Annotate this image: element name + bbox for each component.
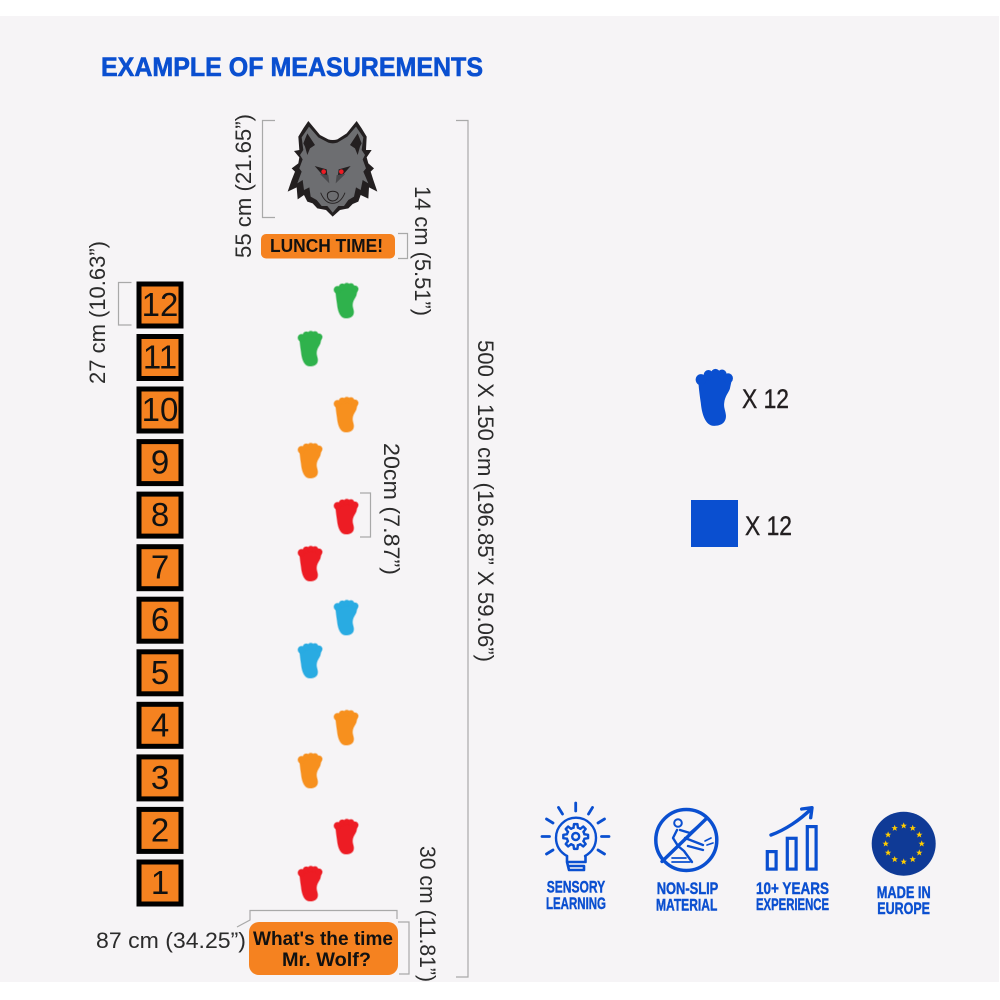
badge: made in europe <box>872 812 936 918</box>
badge: sensory learning <box>542 803 609 913</box>
icon: wolf head <box>288 121 377 217</box>
sign: lunch time: LUNCH TIME! <box>270 236 383 256</box>
square 8: 8 <box>151 496 169 533</box>
sign: what's the time mr wolf: Mr. Wolf? <box>282 950 371 971</box>
square 3: 3 <box>151 759 169 796</box>
foot 4 orange <box>334 710 358 745</box>
dimension: start sign height bracket <box>398 922 409 974</box>
foot 11 green <box>298 331 322 366</box>
badge: sensory learning: LEARNING <box>546 894 606 913</box>
badge: 10+ years experience <box>756 808 829 914</box>
foot 7 red <box>298 546 322 581</box>
label: 87 cm: 87 cm (34.25”) <box>96 928 246 953</box>
dimension: lunch sign bracket <box>398 234 408 258</box>
square 4: 4 <box>151 706 169 743</box>
icon: EU flag circle <box>872 812 936 876</box>
square 1: 1 <box>151 864 169 901</box>
square 6: 6 <box>151 601 169 638</box>
foot 8 red <box>334 499 358 534</box>
square 5: 5 <box>151 654 169 691</box>
square 9 <box>139 442 181 484</box>
dimension: total height bracket <box>456 120 468 977</box>
square 9: 9 <box>151 444 169 481</box>
badge: non-slip material: NON-SLIP <box>657 879 718 898</box>
square 4 <box>139 704 181 746</box>
badge: made in europe: EUROPE <box>877 899 930 918</box>
foot 10 orange <box>334 397 358 432</box>
square 3 <box>139 757 181 799</box>
label: 14 cm: 14 cm (5.51”) <box>410 186 435 316</box>
badge: non-slip material <box>656 810 718 915</box>
legend: square count: X 12 <box>745 511 792 541</box>
legend: foot count: X 12 <box>742 384 789 414</box>
square 6 <box>139 599 181 641</box>
label: 20 cm: 20cm (7.87”) <box>379 443 404 575</box>
dimension: start sign width bracket <box>237 910 397 927</box>
square 1 <box>139 862 181 904</box>
square 7 <box>139 547 181 589</box>
badge: non-slip material: MATERIAL <box>656 896 717 915</box>
square 12: 12 <box>142 286 178 323</box>
legend: foot count <box>696 369 789 426</box>
foot 3 orange <box>298 753 322 788</box>
square 2: 2 <box>151 811 169 848</box>
sign: what's the time mr wolf <box>249 922 398 975</box>
label: 30 cm: 30 cm (11.81”) <box>415 846 440 982</box>
foot 2 red <box>334 819 358 854</box>
foot 9 orange <box>298 443 322 478</box>
square 7: 7 <box>151 549 169 586</box>
panel: numbered squares <box>139 284 181 904</box>
square 8 <box>139 494 181 536</box>
square 2 <box>139 809 181 851</box>
badge: sensory learning: SENSORY <box>547 878 606 897</box>
dimension: square bracket <box>118 282 132 325</box>
icon: light bulb with gear <box>542 803 609 870</box>
square 5 <box>139 652 181 694</box>
foot 1 red <box>298 866 322 901</box>
dimension: wolf height bracket <box>262 120 275 218</box>
badge: made in europe: MADE IN <box>877 883 931 902</box>
badge: 10+ years experience: 10+ YEARS <box>756 879 829 898</box>
foot 6 blue <box>334 600 358 635</box>
title: EXAMPLE OF MEASUREMENTS <box>101 52 483 82</box>
label: 500 x 150 cm: 500 X 150 cm (196.85” X 59.06”) <box>473 340 498 662</box>
label: 55 cm: 55 cm (21.65”) <box>231 114 256 258</box>
square 10: 10 <box>142 391 178 428</box>
label: 27 cm: 27 cm (10.63”) <box>85 241 110 384</box>
foot 12 green <box>334 283 358 318</box>
sign: what's the time mr wolf: What's the time <box>253 929 393 950</box>
badge: 10+ years experience: EXPERIENCE <box>756 895 829 914</box>
foot 5 blue <box>298 643 322 678</box>
icon: no slipping <box>656 810 717 870</box>
icon: growth chart <box>767 808 816 869</box>
legend: square count <box>691 500 792 547</box>
square 11: 11 <box>143 338 177 376</box>
panel: footprints trail <box>298 283 358 901</box>
dimension: step bracket <box>360 493 370 537</box>
